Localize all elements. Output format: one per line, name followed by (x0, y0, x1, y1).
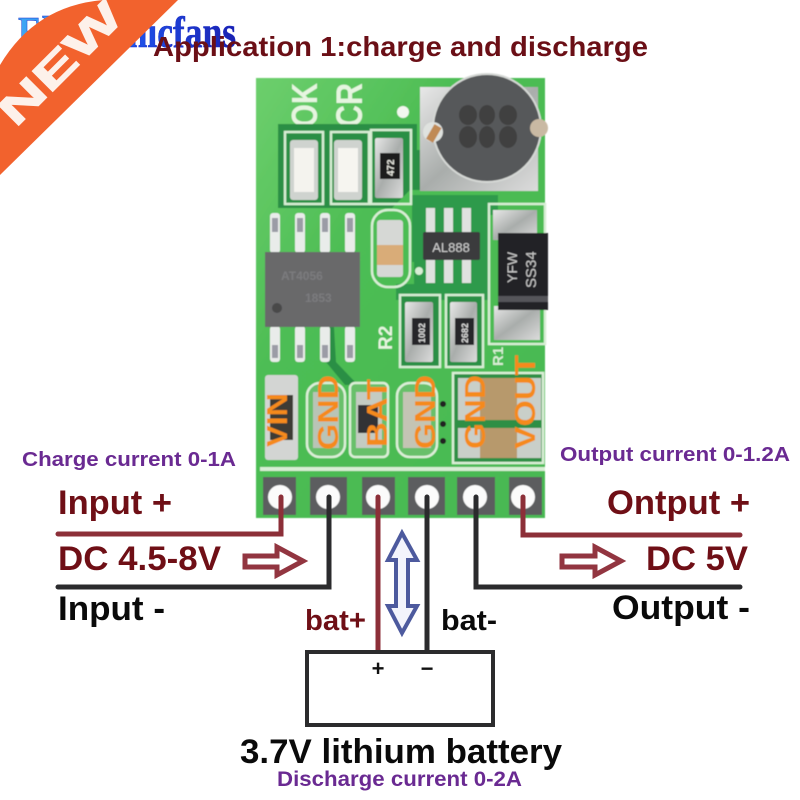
pin labels (262, 355, 542, 450)
output labels: Output - (612, 589, 750, 627)
input labels: Input - (58, 590, 165, 628)
wire: bat plus (376, 497, 380, 652)
input labels: DC 4.5-8V (58, 540, 221, 578)
chip: SOP8 charger: 1853 (305, 291, 332, 305)
wire: output minus (476, 497, 740, 587)
panel: circuit board (256, 73, 548, 518)
pin labels: GND (460, 375, 492, 449)
wire: output plus (523, 497, 740, 535)
chip: AL888 (415, 208, 480, 283)
badge: NEW (0, 0, 178, 175)
chip: AL888: AL888 (432, 240, 470, 255)
resistor 2682 (446, 295, 483, 367)
battery label: 3.7V lithium battery (240, 733, 562, 771)
logo watermark: Electronicfans (18, 8, 236, 57)
resistor 1002 (400, 295, 440, 367)
pin labels: VOUT (510, 355, 542, 449)
title: Application 1:charge and discharge (153, 31, 648, 62)
output labels (607, 484, 750, 627)
label: bat plus: bat+ (305, 605, 366, 637)
input labels: Input + (58, 484, 172, 522)
chip: SOP8 charger: AT4056 (281, 269, 323, 283)
output labels: Ontput + (607, 484, 750, 522)
pin labels: VIN (262, 393, 294, 447)
battery: − (421, 656, 433, 681)
silkscreen label R2: R2 (376, 326, 397, 350)
label: bat minus: bat- (441, 605, 497, 637)
output current label: Output current 0-1.2A (560, 444, 790, 466)
silkscreen label R1: R1 (490, 347, 507, 366)
arrow: battery charge and discharge (388, 533, 417, 633)
diode SS34 (489, 204, 548, 344)
resistor 2682: 2682 (460, 323, 470, 343)
arrow: output direction (562, 547, 621, 575)
pin labels: BAT (362, 379, 394, 447)
wire: bat minus (424, 497, 430, 652)
resistor 472 (371, 130, 411, 204)
inductor (420, 73, 548, 191)
capacitor (372, 210, 410, 287)
input labels (58, 484, 221, 628)
pin labels: GND (313, 375, 345, 450)
arrow: input direction (245, 547, 303, 575)
output labels: DC 5V (646, 540, 748, 578)
diode SS34: SS34 (523, 251, 540, 288)
diode SS34: YFW (504, 251, 520, 283)
pin labels: GND (410, 375, 442, 449)
header pads (263, 477, 542, 515)
silkscreen labels OK and CR: OK (284, 83, 325, 127)
wire: input plus (58, 497, 281, 534)
silkscreen labels OK and CR: CR (329, 83, 370, 127)
discharge current label: Discharge current 0-2A (277, 768, 522, 791)
battery (307, 652, 493, 725)
silkscreen labels OK and CR (284, 83, 370, 127)
LED CR (331, 132, 369, 204)
bottom components row (265, 373, 543, 463)
resistor 1002: 1002 (417, 323, 427, 343)
charge current label: Charge current 0-1A (22, 449, 236, 471)
chip: SOP8 charger (265, 213, 360, 362)
LED OK (285, 132, 323, 204)
dark copper areas (278, 124, 420, 208)
wire: input minus (58, 497, 329, 587)
resistor 472: 472 (386, 159, 397, 176)
battery: + (372, 656, 384, 681)
